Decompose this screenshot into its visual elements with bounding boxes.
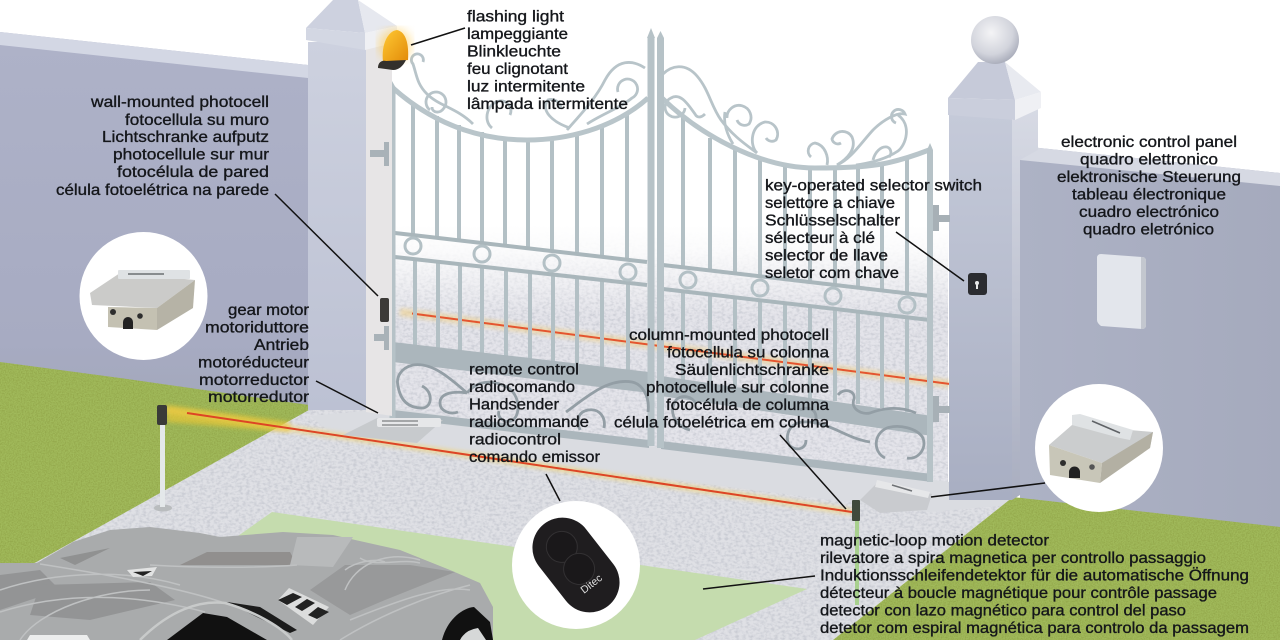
label: electronic control panel: quadro elettronico [1080, 152, 1218, 168]
label: key-operated selector switch: key-operated selector switch [765, 178, 982, 194]
label: electronic control panel: cuadro electrónico [1079, 204, 1219, 221]
label: flashing light: lâmpada intermitente [467, 96, 628, 113]
hood scoop [127, 567, 157, 577]
label: key-operated selector switch [765, 178, 982, 282]
right lawn [830, 495, 1280, 640]
label: flashing light [467, 8, 628, 113]
paved driveway behind and in front of the gate [35, 253, 1009, 640]
leader lines [275, 28, 1045, 589]
label: key-operated selector switch: Schlüsselschalter [765, 212, 901, 230]
label: column-mounted photocell: fotocellula su colonna [667, 344, 829, 362]
label: flashing light: lampeggiante [467, 26, 568, 43]
label: column-mounted photocell: Säulenlichtschranke [675, 362, 829, 379]
windshield [167, 613, 267, 640]
right gate post [933, 16, 1041, 500]
label: wall-mounted photocell: fotocellula su muro [125, 112, 269, 129]
icon: flashing light [378, 29, 411, 70]
remote control inset: Ditec [578, 572, 605, 596]
gear motor inset, right [1035, 384, 1163, 512]
curved top rails [393, 88, 929, 168]
bumper trim [27, 635, 90, 640]
gate hinges [370, 142, 389, 350]
label: flashing light: luz intermitente [467, 78, 585, 96]
label: remote control: remote control [469, 362, 579, 378]
gear motor on ground, left [343, 418, 443, 443]
icon: electronic control panel box [1097, 254, 1146, 329]
label: magnetic-loop motion detector [820, 532, 1249, 637]
icon: wall-mounted photocell [380, 298, 389, 322]
thick lower rails [393, 342, 932, 482]
label: flashing light: flashing light [467, 8, 565, 26]
car [0, 527, 493, 640]
gate hinges [933, 205, 950, 422]
car body highlights [0, 557, 470, 640]
label: flashing light: Blinkleuchte [467, 44, 561, 60]
red safety beam in driveway [165, 405, 852, 512]
label: wall-mounted photocell [56, 94, 270, 199]
magnetic loop area [90, 512, 807, 640]
stiles [392, 38, 930, 482]
icon: key selector switch [968, 273, 987, 295]
ball finial [971, 16, 1019, 64]
label: key-operated selector switch: sélecteur à clé [765, 230, 875, 247]
label: magnetic-loop motion detector: Induktionsschleifendetektor für die automatische Öffnung [820, 566, 1249, 584]
label: remote control: Handsender [469, 396, 560, 414]
spear tips [389, 28, 933, 150]
label: electronic control panel [1057, 134, 1241, 238]
label: gear motor: motorreductor [199, 372, 310, 389]
label: magnetic-loop motion detector: détecteur à boucle magnétique pour contrôle passage [820, 585, 1217, 602]
gear motor inset, left [80, 232, 208, 360]
label: electronic control panel: tableau électronique [1072, 186, 1226, 204]
lower scrolls [398, 365, 924, 458]
label: wall-mounted photocell: fotocélula de pared [117, 164, 269, 181]
upper scrolls, left leaf [411, 54, 645, 130]
label: gear motor: motorredutor [208, 389, 310, 406]
label: remote control [469, 362, 601, 466]
label: gear motor: Antrieb [254, 337, 309, 354]
horizontal rails [395, 233, 930, 320]
gear motor on ground, right [860, 480, 932, 513]
label: magnetic-loop motion detector: detetor com espiral magnética para controlo da passagem [820, 620, 1249, 637]
upper scrolls, right leaf [663, 67, 906, 165]
label: magnetic-loop motion detector: detector con lazo magnético para control del paso [820, 602, 1186, 620]
label: column-mounted photocell: célula fotoelétrica em coluna [614, 414, 829, 432]
label: column-mounted photocell: photocellule sur colonne [646, 380, 829, 396]
label: gear motor: motoriduttore [205, 320, 309, 336]
label: wall-mounted photocell: Lichtschranke aufputz [102, 129, 269, 146]
left boundary wall [0, 32, 308, 420]
label: electronic control panel: elektronische Steuerung [1057, 169, 1241, 186]
label: gear motor [198, 302, 310, 406]
remote control inset [512, 501, 640, 629]
label: remote control: comando emissor [469, 449, 601, 466]
label: remote control: radiocomando [469, 379, 575, 396]
label: column-mounted photocell [614, 327, 829, 432]
label: remote control: radiocommande [469, 414, 589, 431]
left leaf bars [413, 104, 628, 371]
label: key-operated selector switch: selettore a chiave [765, 195, 895, 212]
right boundary wall [1020, 147, 1280, 560]
label: remote control: radiocontrol [469, 432, 561, 448]
label: wall-mounted photocell: célula fotoelétrica na parede [56, 182, 269, 199]
label: wall-mounted photocell: wall-mounted photocell [90, 94, 269, 111]
label: magnetic-loop motion detector: magnetic-loop motion detector [820, 532, 1050, 550]
label: column-mounted photocell: fotocélula de columna [666, 397, 829, 414]
label: column-mounted photocell: column-mounted photocell [629, 327, 829, 344]
label: electronic control panel: electronic control panel [1061, 134, 1237, 151]
label: magnetic-loop motion detector: rilevatore a spira magnetica per controllo passaggio [820, 550, 1206, 567]
left lawn [0, 362, 309, 563]
label: wall-mounted photocell: photocellule sur mur [113, 146, 270, 164]
interrupted photocell beam behind gate [400, 312, 950, 384]
left column photocell post [154, 405, 172, 512]
label: key-operated selector switch: seletor com chave [765, 265, 899, 282]
hood vents [278, 588, 329, 625]
label: gear motor: motoréducteur [198, 354, 310, 372]
right column photocell post [852, 500, 860, 605]
gate [389, 28, 933, 482]
label: electronic control panel: quadro eletrónico [1083, 222, 1214, 238]
label: gear motor: gear motor [228, 302, 310, 319]
label: flashing light: feu clignotant [467, 61, 569, 78]
ring ornaments [405, 238, 915, 313]
right leaf bars [683, 118, 907, 412]
left gate post [306, 0, 397, 416]
label: key-operated selector switch: selector de llave [765, 248, 888, 264]
wheel [442, 607, 493, 640]
